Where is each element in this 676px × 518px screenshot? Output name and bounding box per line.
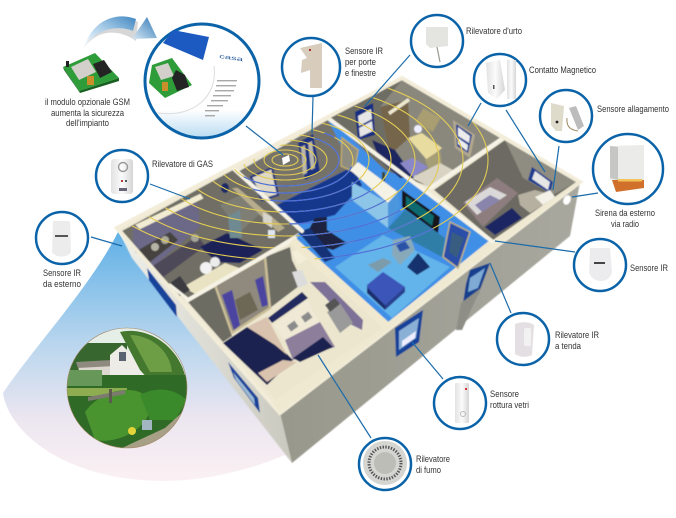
label: shock: Rilevatore d'urto xyxy=(466,26,522,37)
label: door IR: Sensore IR xyxy=(345,46,383,57)
wall top outline xyxy=(117,78,580,413)
left wall windows xyxy=(147,268,260,413)
label: siren: Sirena da esterno xyxy=(595,208,655,219)
label: GSM line 3: dell'impianto xyxy=(66,118,109,129)
right wall windows xyxy=(395,263,490,357)
label: glass line 2: rottura vetri xyxy=(490,400,529,411)
radio waves yellow xyxy=(132,88,488,260)
device: door sensor IR xyxy=(282,38,340,96)
label: smoke: Rilevatore xyxy=(416,454,450,465)
panel curve xyxy=(158,66,214,114)
curved arrow to panel xyxy=(84,16,157,48)
garden photo xyxy=(67,328,187,450)
device: smoke detector xyxy=(359,438,411,490)
label: GSM line 2: aumenta la sicurezza xyxy=(51,108,125,119)
wall siren marker xyxy=(562,194,572,206)
label: glass: Sensore xyxy=(490,389,519,400)
LCD display xyxy=(163,30,209,60)
device: magnetic contact xyxy=(474,54,526,106)
label: gas: Rilevatore di GAS xyxy=(152,159,213,170)
room: upper left xyxy=(122,170,300,300)
label: curtain: Rilevatore IR xyxy=(555,330,599,341)
label: door IR line 2: per porte xyxy=(345,57,376,68)
left outer wall xyxy=(117,228,292,463)
device: glass break sensor xyxy=(434,377,486,429)
house cutaway xyxy=(117,78,580,463)
device: curtain IR detector xyxy=(497,313,549,365)
label: door IR line 3: e finestre xyxy=(345,68,376,79)
device: gas detector xyxy=(96,150,148,202)
room: bedroom xyxy=(330,80,500,187)
label: smoke line 2: di fumo xyxy=(416,465,441,476)
outer wall top edge xyxy=(117,78,580,413)
label: outdoor IR: Sensore IR xyxy=(43,268,81,279)
device: flood sensor xyxy=(540,90,592,142)
control panel circle xyxy=(145,24,259,138)
device: IR sensor xyxy=(574,239,626,291)
exterior view fan xyxy=(3,232,292,481)
label: siren line 2: via radio xyxy=(611,219,639,230)
keypad dots xyxy=(205,80,237,116)
room: bathroom xyxy=(434,140,576,240)
label: GSM module: il modulo opzionale GSM xyxy=(45,97,130,108)
GSM module in panel xyxy=(149,58,192,98)
brand label: casa xyxy=(219,54,245,63)
control panel on wall xyxy=(282,155,290,165)
front cream tiles xyxy=(272,182,580,413)
radio waves blue xyxy=(243,132,434,259)
device: outdoor IR sensor xyxy=(36,212,88,264)
device: shock detector xyxy=(411,15,463,67)
garden photo outline xyxy=(67,328,187,448)
label: outdoor IR line 2: da esterno xyxy=(43,279,81,290)
label: curtain line 2: a tenda xyxy=(555,341,582,352)
room: living xyxy=(238,120,490,322)
label: magnetic: Contatto Magnetico xyxy=(529,65,596,76)
GSM module xyxy=(63,53,119,93)
room: kitchen xyxy=(188,242,385,405)
right outer wall xyxy=(280,182,580,463)
connector lines xyxy=(91,55,598,438)
device: outdoor siren xyxy=(593,134,663,204)
interior partition walls xyxy=(170,118,503,326)
